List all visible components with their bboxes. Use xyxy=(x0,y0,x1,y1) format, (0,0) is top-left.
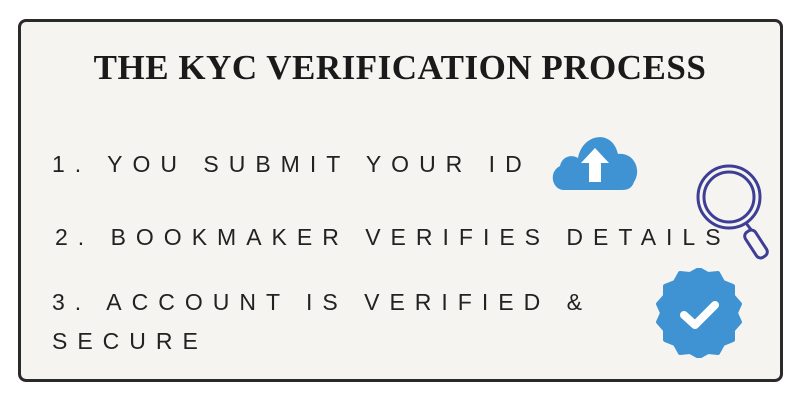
step 3 text: SECURE xyxy=(52,328,208,354)
title: THE KYC VERIFICATION PROCESS xyxy=(94,48,706,87)
step 1 text: 1. YOU SUBMIT YOUR ID xyxy=(52,151,532,177)
icon: upload cloud xyxy=(552,137,638,190)
step 3 text xyxy=(52,289,592,354)
icon: verified badge xyxy=(656,268,742,358)
step 3 text: 3. ACCOUNT IS VERIFIED & xyxy=(52,289,592,315)
step 2 text: 2. BOOKMAKER VERIFIES DETAILS xyxy=(55,224,731,250)
icon: magnifier xyxy=(696,164,769,260)
